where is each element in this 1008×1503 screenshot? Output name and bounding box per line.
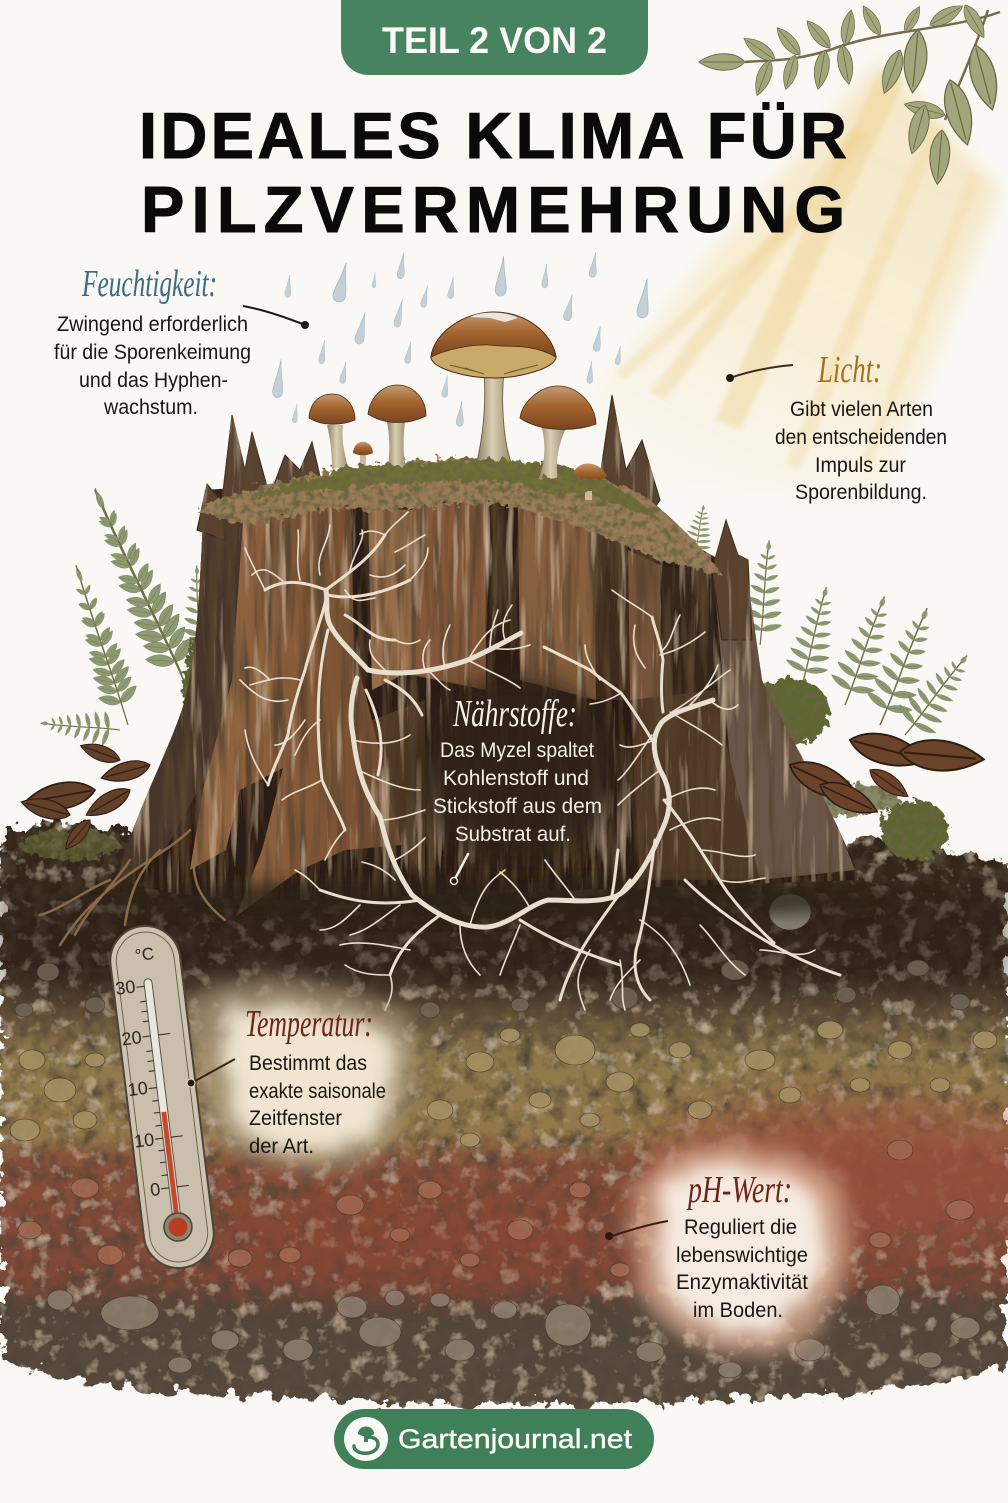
heading: Temperatur: Temperatur: bbox=[245, 1003, 373, 1045]
mercury bulb bbox=[162, 1211, 194, 1243]
text: pH-Wert body bbox=[676, 1216, 808, 1322]
medium mushroom bbox=[368, 385, 426, 470]
title: PILZVERMEHRUNG bbox=[141, 173, 845, 246]
text: Licht body: Gibt vielen Arten bbox=[790, 398, 933, 421]
raindrops bbox=[272, 251, 653, 427]
callout patch: Temperatur bbox=[187, 978, 417, 1169]
stump top moss surface bbox=[195, 458, 722, 575]
stump bbox=[115, 395, 860, 916]
text: Temperatur body: der Art. bbox=[249, 1135, 314, 1158]
icon: thermometer bbox=[106, 922, 218, 1272]
tiny mushroom bbox=[353, 442, 373, 471]
glass tube bbox=[144, 978, 181, 1218]
thermometer labels bbox=[114, 977, 161, 1201]
arrow: Feuchtigkeit pointer bbox=[243, 306, 309, 329]
thermometer labels: 0 bbox=[149, 1179, 161, 1200]
text: Licht body bbox=[775, 398, 947, 504]
text: Licht body: Sporenbildung. bbox=[795, 481, 927, 504]
text: Feuchtigkeit body: wachstum. bbox=[103, 396, 198, 419]
heading: pH-Wert: pH-Wert: bbox=[686, 1169, 792, 1211]
thermometer labels: 10 bbox=[127, 1078, 149, 1100]
footer text: Gartenjournal.net bbox=[398, 1424, 633, 1454]
thermometer labels: 30 bbox=[114, 977, 137, 999]
text: Licht body: den entscheidenden bbox=[775, 426, 947, 449]
text: Nährstoffe body: Kohlenstoff und bbox=[443, 767, 589, 790]
sun rays bbox=[590, 60, 1000, 500]
ferns right bbox=[680, 503, 987, 750]
text: Feuchtigkeit body bbox=[54, 313, 251, 419]
text: Licht body: Impuls zur bbox=[815, 454, 906, 477]
text: Nährstoffe body: Stickstoff aus dem bbox=[433, 795, 602, 818]
text: Temperatur body bbox=[249, 1052, 386, 1158]
badge: part indicator: TEIL 2 VON 2 bbox=[382, 20, 607, 61]
title bbox=[139, 99, 847, 246]
ferns left bbox=[39, 478, 219, 748]
text: Feuchtigkeit body: Zwingend erforderlich bbox=[57, 313, 248, 336]
text: Temperatur body: Zeitfenster bbox=[249, 1107, 342, 1130]
footer badge bbox=[334, 1409, 654, 1469]
thermometer labels: 10 bbox=[133, 1129, 155, 1152]
text: Nährstoffe body: Substrat auf. bbox=[455, 823, 571, 846]
text: pH-Wert body: lebenswichtige bbox=[676, 1244, 808, 1267]
thermometer body bbox=[106, 922, 218, 1272]
text: Nährstoffe body bbox=[433, 739, 602, 846]
leaf litter right bbox=[784, 726, 985, 822]
red mercury bbox=[161, 1112, 179, 1219]
stump spikes bbox=[197, 395, 752, 640]
tiny right mushroom bbox=[572, 463, 607, 500]
stones in soil bbox=[10, 894, 997, 1378]
callout patch: pH-Wert bbox=[631, 1145, 851, 1355]
right medium mushroom bbox=[520, 386, 596, 480]
roots left bbox=[40, 830, 225, 945]
nutrient text dark patch bbox=[416, 678, 620, 862]
text: Nährstoffe body: Das Myzel spaltet bbox=[440, 739, 594, 762]
arrow: Temperatur pointer bbox=[187, 1059, 235, 1087]
badge: part indicator bbox=[341, 0, 648, 75]
moss and greenery at stump base bbox=[20, 630, 949, 860]
text: Temperatur body: Bestimmt das bbox=[249, 1052, 367, 1075]
soil cross-section bbox=[0, 822, 1008, 1405]
arrow: pH-Wert pointer bbox=[605, 1221, 668, 1240]
leaf litter left bbox=[19, 739, 152, 853]
ground mound at stump base bbox=[100, 880, 900, 920]
foliage: top right branches bbox=[699, 0, 1004, 185]
heading: Nährstoffe: Nährstoffe: bbox=[452, 693, 577, 735]
unit label: °C bbox=[134, 944, 155, 965]
text: Feuchtigkeit body: und das Hyphen- bbox=[79, 369, 228, 392]
arrow: Nährstoffe pointer bbox=[450, 854, 468, 884]
large mushroom bbox=[431, 312, 556, 462]
thermometer labels: 20 bbox=[120, 1027, 143, 1049]
stump body and dark interior bbox=[115, 480, 860, 916]
text: pH-Wert body: im Boden. bbox=[693, 1299, 783, 1322]
arrow: Licht pointer bbox=[726, 365, 793, 382]
text: pH-Wert body: Enzymaktivität bbox=[676, 1271, 808, 1294]
text: Temperatur body: exakte saisonale bbox=[249, 1080, 386, 1103]
text: Feuchtigkeit body: für die Sporenkeimung bbox=[54, 341, 251, 364]
mycelium network bbox=[240, 512, 840, 1010]
moss clumps around mushroom feet bbox=[330, 459, 605, 493]
mushrooms bbox=[309, 312, 607, 500]
text: pH-Wert body: Reguliert die bbox=[684, 1216, 797, 1239]
heading: Licht: Licht: bbox=[817, 349, 882, 391]
small mushroom far left bbox=[309, 394, 355, 469]
scale ticks bbox=[136, 984, 189, 1189]
icon: logo mushroom bbox=[344, 1417, 388, 1461]
title: IDEALES KLIMA FÜR bbox=[139, 99, 847, 172]
heading: Feuchtigkeit: Feuchtigkeit: bbox=[81, 263, 217, 305]
soil colour zones bbox=[0, 880, 1008, 1290]
